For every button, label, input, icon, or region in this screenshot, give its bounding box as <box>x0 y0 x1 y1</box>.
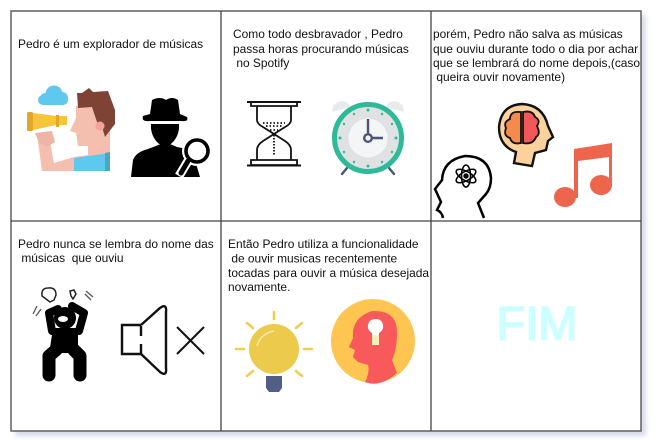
icon: head with idea <box>331 299 415 384</box>
icon: muted speaker <box>122 306 204 374</box>
icon: alarm clock <box>332 101 404 174</box>
icon: hourglass <box>247 102 301 166</box>
text: solution: de ouvir musicas recentemente <box>228 252 398 266</box>
text: time: no Spotify <box>233 56 289 70</box>
icon: light bulb <box>236 312 312 392</box>
text: never remembers: Pedro nunca se lembra do nome das <box>18 237 214 251</box>
panel: explorer <box>18 37 212 177</box>
icon: head with brain <box>499 104 553 166</box>
text: forgetting <box>433 27 640 84</box>
text: never remembers: músicas que ouviu <box>18 251 124 265</box>
text: solution: novamente. <box>228 280 290 294</box>
text: explorer: Pedro é um explorador de músicas <box>18 37 203 51</box>
icon: head with atom <box>435 156 491 218</box>
text: time <box>233 27 409 70</box>
text: forgetting: que se lembrará do nome depois,(caso <box>433 56 640 70</box>
text: solution <box>228 237 429 294</box>
text: FIM: FIM <box>497 296 577 350</box>
icon: man with telescope <box>27 86 115 171</box>
text: time: passa horas procurando músicas <box>233 42 409 56</box>
panel: forgetting <box>433 27 640 218</box>
icon: frustrated person <box>33 288 93 375</box>
icon: detective with magnifier <box>131 98 212 177</box>
text: solution: tocadas para ouvir a música desejada <box>228 266 429 280</box>
text: forgetting: porém, Pedro não salva as músicas <box>433 27 623 41</box>
text: never remembers <box>18 237 214 265</box>
panel: time <box>233 27 409 174</box>
panel: never remembers <box>18 237 214 375</box>
text: solution: Então Pedro utiliza a funcionalidade <box>228 237 419 251</box>
text: forgetting: que ouviu durante todo o dia por achar <box>433 42 638 56</box>
panel: solution <box>228 237 429 392</box>
text: forgetting: queira ouvir novamente) <box>433 70 565 84</box>
text: time: Como todo desbravador , Pedro <box>233 27 403 41</box>
icon: music note <box>554 143 612 207</box>
